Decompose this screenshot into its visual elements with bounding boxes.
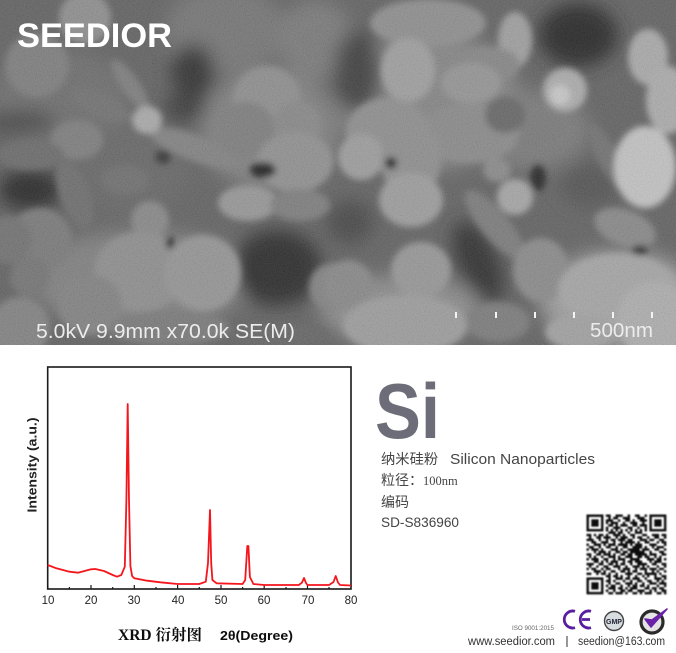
- x axis tick labels: 10: [42, 595, 54, 607]
- icon: QR code: [586, 516, 666, 593]
- x axis tick labels: 60: [258, 595, 270, 607]
- axis ticks: [48, 585, 329, 589]
- plot frame: [48, 367, 351, 589]
- icon: check mark seal: [641, 609, 667, 633]
- XRD curve: [48, 404, 351, 586]
- product name in English: Silicon Nanoparticles: [450, 451, 595, 468]
- certification label: ISO: ISO 9001:2015: [512, 626, 555, 632]
- icon: GMP seal: [604, 612, 624, 630]
- product name: 纳米硅粉: [381, 451, 438, 468]
- icon: CE mark: [564, 611, 591, 628]
- x axis tick labels: 30: [128, 595, 140, 607]
- heading: element symbol: Si: [375, 367, 440, 455]
- panel: SEM micrograph: [0, 0, 676, 358]
- separator: [566, 636, 568, 647]
- SEM acquisition parameters: 5.0kV 9.9mm x70.0k SE(M): [36, 321, 295, 343]
- right side particles: [370, 0, 486, 47]
- y axis title: Intensity (a.u.): [26, 418, 40, 512]
- brand name: SEEDIOR: [17, 17, 172, 55]
- x axis tick labels: 50: [215, 595, 227, 607]
- particle size: 粒径：100nm: [381, 472, 458, 488]
- product code: SD-S836960: [381, 514, 459, 530]
- film grain: [0, 0, 676, 345]
- deep shadows: [166, 237, 174, 249]
- website: www.seedior.com: [467, 636, 555, 648]
- code label: 编码: [381, 494, 409, 510]
- email: seedion@163.com: [578, 636, 665, 648]
- text block: product details: [381, 451, 595, 530]
- left side particles: [59, 0, 111, 44]
- chart: XRD pattern: [26, 367, 357, 644]
- x axis tick labels: 40: [172, 595, 184, 607]
- icon: GMP seal: GMP: [606, 619, 622, 626]
- x axis tick labels: [42, 595, 357, 607]
- x axis title: XRD 衍射图: [118, 626, 202, 644]
- scale bar: 500nm: [590, 320, 653, 342]
- x axis unit: 2θ(Degree): [220, 628, 293, 643]
- x axis tick labels: 20: [85, 595, 97, 607]
- contact line: [467, 636, 665, 648]
- x axis tick labels: 70: [302, 595, 314, 607]
- x axis tick labels: 80: [345, 595, 357, 607]
